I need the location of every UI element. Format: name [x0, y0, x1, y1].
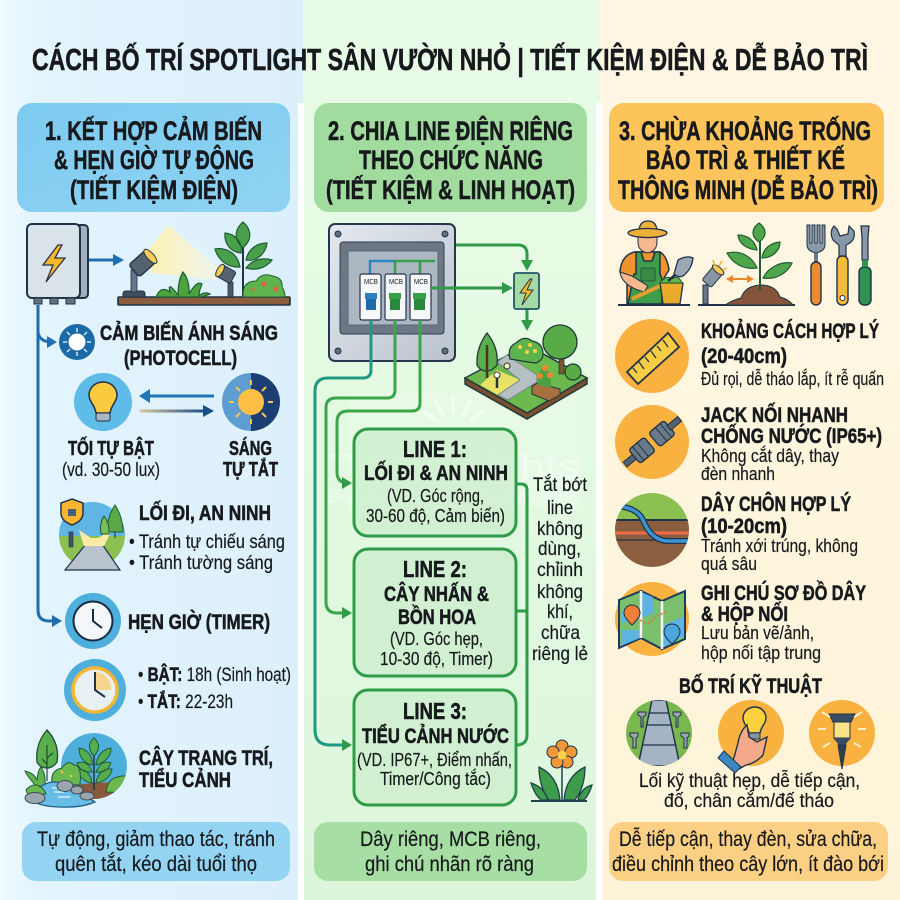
MCB 1: MCB — [364, 279, 378, 286]
box: line 1: (VD. Góc rộng, — [387, 485, 484, 506]
heading: photocell — [100, 322, 278, 370]
icon: garden tools — [807, 225, 871, 305]
background: column 2 — [303, 0, 600, 900]
icon: clock — [65, 593, 121, 649]
box: line 2: BỒN HOA — [398, 605, 476, 629]
text: jack: Không cắt dây, thay — [701, 445, 840, 466]
text: path and security: • Tránh tường sáng — [129, 552, 273, 574]
heading: separate circuits: (TIẾT KIỆM & LINH HOẠT) — [326, 174, 575, 205]
heading: sensor and timer: & HẸN GIỜ TỰ ĐỘNG — [54, 144, 254, 175]
illustration: lamp spacing — [698, 223, 795, 305]
callout: column 2 summary: Dây riêng, MCB riêng, — [360, 828, 541, 851]
text: path and security: • Tránh tự chiếu sáng — [129, 531, 285, 553]
text: wiring map — [701, 581, 866, 663]
heading: timer: HẸN GIỜ (TIMER) — [128, 610, 270, 634]
text: side note: khí, — [547, 601, 573, 623]
icon: hand with bulb — [718, 700, 784, 773]
panel: column 2 electrical lines — [314, 103, 592, 881]
callout: column 2 summary: ghi chú nhãn rõ ràng — [365, 853, 534, 876]
text: on/off schedule: • BẬT: 18h (Sinh hoạt) — [138, 664, 291, 686]
heading: maintenance space — [609, 103, 884, 212]
text: side note: chữa — [541, 622, 580, 644]
heading: separate circuits — [314, 103, 587, 212]
box: line 1 — [354, 429, 516, 536]
heading: photocell: (PHOTOCELL) — [124, 347, 237, 370]
text: wiring map: & HỘP NỐI — [701, 602, 788, 626]
box: line 1: 30-60 độ, Cảm biến) — [366, 505, 505, 526]
icon: narrow walkway — [626, 700, 692, 766]
box: line 2: LINE 2: — [403, 556, 467, 582]
illustration: isometric garden — [465, 325, 587, 419]
icon: on/off clock — [64, 659, 126, 721]
text: technical layout note — [639, 769, 860, 812]
text: side note: chỉinh — [537, 559, 583, 581]
box: line 2: 10-30 độ, Timer) — [380, 648, 493, 669]
box: line 3 — [354, 690, 516, 805]
icon: breaker panel — [329, 224, 455, 361]
panel: column 1 automation — [17, 103, 291, 881]
text: side note — [532, 473, 588, 665]
text: light off: TỰ TẮT — [223, 457, 278, 481]
heading: separate circuits: THEO CHỨC NĂNG — [359, 144, 543, 175]
heading: sensor and timer: (TIẾT KIỆM ĐIỆN) — [70, 174, 238, 205]
watermark: Tuyến Lights — [325, 448, 580, 486]
text: buried cable: DÂY CHÔN HỢP LÝ — [701, 492, 851, 516]
icon: buried cable — [615, 493, 689, 567]
heading: technical layout: BỐ TRÍ KỸ THUẬT — [679, 674, 822, 698]
callout: column 1 summary: Tự động, giảm thao tác, tránh — [37, 828, 275, 851]
text: dark on — [62, 436, 160, 481]
connector: MCB outputs — [315, 320, 420, 745]
arrows: on/off cycle — [139, 389, 214, 417]
box: line 2: (VD. Góc hẹp, — [390, 628, 483, 649]
connector: trunk line to timer — [38, 305, 55, 621]
text: side note: không — [537, 581, 583, 603]
MCB 2: MCB — [389, 279, 403, 286]
text: spacing — [701, 319, 884, 389]
watermark: Đèn chiếu sáng không gian sống — [328, 489, 579, 506]
box: line 1: LINE 1: — [403, 436, 467, 462]
icon: ruler — [615, 319, 689, 393]
text: side note: Tắt bớt — [533, 473, 587, 496]
text: wiring map: hộp nối tập trung — [701, 642, 821, 663]
text: dark on: (vd. 30-50 lux) — [62, 460, 160, 481]
icon: wiring map — [615, 582, 689, 656]
heading: landscape plants — [139, 746, 273, 792]
text: spacing: (20-40cm) — [701, 345, 787, 368]
text: jack — [701, 403, 882, 484]
box: line 2 — [354, 549, 516, 676]
heading: photocell: CẢM BIẾN ÁNH SÁNG — [100, 322, 278, 345]
callout: column 2 summary — [314, 822, 587, 881]
arrow: box to lights — [89, 254, 124, 266]
icon: control box — [27, 224, 88, 304]
text: technical layout note: Lối kỹ thuật hẹp, dễ tiếp cận, — [639, 769, 860, 792]
text: side note: line — [547, 497, 573, 519]
icon: flower — [531, 740, 592, 801]
text: wiring map: Lưu bản vẽ/ảnh, — [701, 622, 814, 643]
text: buried cable — [701, 492, 858, 574]
box: line 2: CÂY NHẤN & — [384, 582, 489, 606]
text: jack: đèn nhanh — [701, 463, 775, 484]
text: jack: JACK NỐI NHANH — [701, 403, 848, 427]
MCB 3: MCB — [414, 279, 428, 286]
text: path and security: LỐI ĐI, AN NINH — [139, 501, 271, 525]
box: line 3: (VD. IP67+, Điểm nhấn, — [357, 749, 512, 770]
arrowheads — [47, 336, 62, 627]
text: on/off schedule: • TẮT: 22-23h — [138, 691, 233, 713]
box: line 1: LỐI ĐI & AN NINH — [364, 461, 508, 485]
background: column 1 — [0, 0, 303, 900]
text: path and security — [129, 501, 285, 574]
text: side note: không — [537, 518, 583, 540]
watermark — [325, 391, 582, 509]
callout: column 3 summary — [609, 822, 888, 881]
connector: to junction box — [431, 245, 527, 323]
text: side note: dùng, — [538, 538, 581, 560]
text: light off — [223, 437, 278, 481]
heading: sensor and timer: 1. KẾT HỢP CẢM BIẾN — [45, 114, 262, 146]
text: dark on: TỐI TỰ BẬT — [68, 436, 154, 460]
icon: photocell — [59, 324, 95, 360]
text: side note: riêng lẻ — [532, 643, 588, 665]
text: on/off schedule — [138, 664, 291, 713]
callout: column 1 summary — [22, 822, 290, 881]
illustration: garden spotlights — [118, 222, 290, 305]
icon: stake light — [809, 700, 875, 769]
heading: separate circuits: 2. CHIA LINE ĐIỆN RIÊNG — [328, 115, 573, 146]
icon: path and security — [59, 499, 125, 570]
panel: column 3 maintenance — [609, 103, 888, 881]
icon: bulb — [74, 373, 132, 431]
text: light off: SÁNG — [229, 437, 272, 460]
box: line 3: LINE 3: — [403, 698, 467, 724]
box: line 3: TIỂU CẢNH NƯỚC — [362, 724, 509, 748]
icon: junction box — [514, 273, 539, 309]
background: column 3 — [600, 0, 900, 900]
callout: column 1 summary: quên tắt, kéo dài tuổi thọ — [55, 853, 257, 876]
text: technical layout note: đố, chân cắm/đế tháo — [664, 789, 834, 812]
icon: sun day/night — [222, 373, 280, 431]
icon: gardener — [618, 221, 693, 305]
text: buried cable: quá sâu — [701, 553, 757, 574]
text: buried cable: Tránh xới trúng, không — [701, 535, 858, 556]
arrowheads: junction box — [502, 260, 533, 331]
arrowheads: line inputs — [342, 477, 352, 751]
box: line 3: Timer/Công tắc) — [380, 768, 491, 789]
heading: landscape plants: CÂY TRANG TRÍ, — [139, 746, 273, 770]
icon: landscape plants — [25, 730, 130, 807]
connector: right side links — [516, 484, 527, 745]
heading: sensor and timer — [17, 103, 290, 212]
icon: waterproof jack — [615, 405, 689, 479]
heading: landscape plants: TIỂU CẢNH — [139, 769, 231, 792]
text: buried cable: (10-20cm) — [701, 515, 787, 538]
